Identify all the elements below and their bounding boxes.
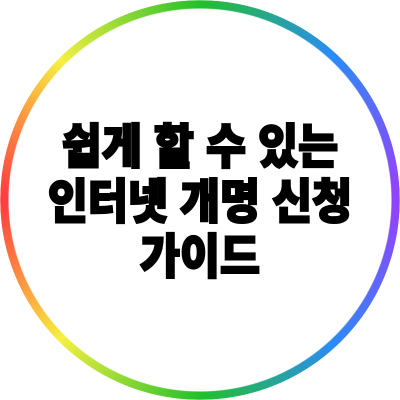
title — [48, 122, 352, 284]
title: 가이드 — [140, 232, 260, 284]
title: 인터넷 개명 신청 — [48, 177, 352, 229]
title: 쉽게 할 수 있는 — [62, 122, 338, 174]
